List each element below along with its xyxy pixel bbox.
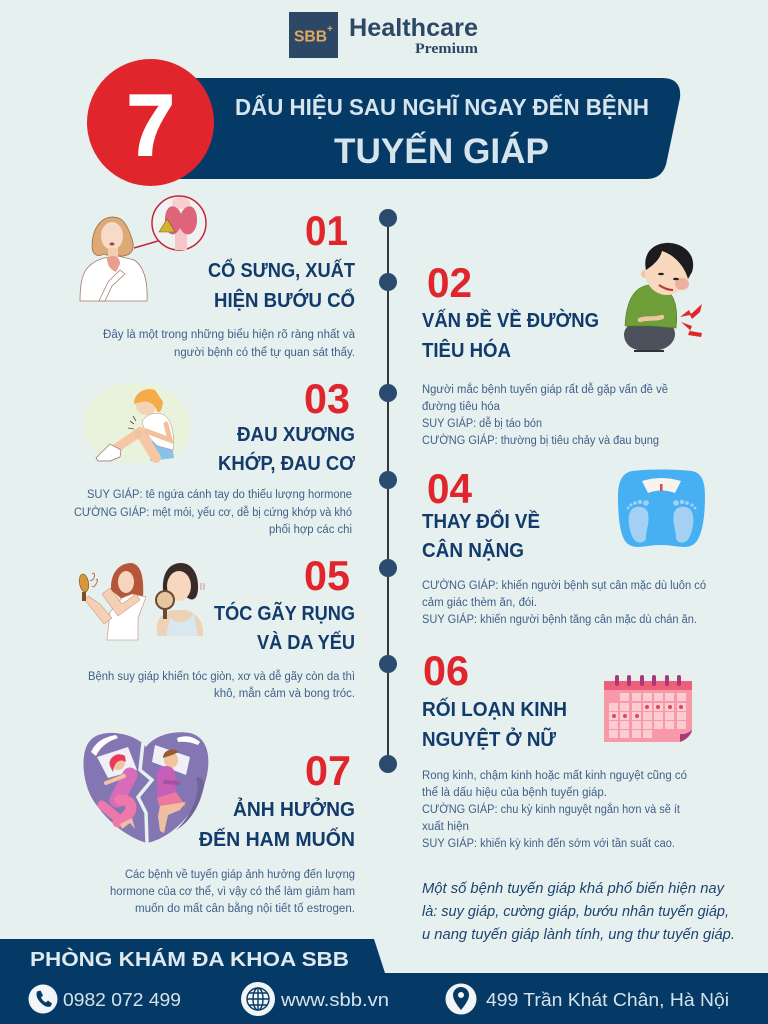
text 03: CƯỜNG GIÁP: mệt mỏi, yếu cơ, dễ bị cứng khớp và khó xyxy=(74,506,352,519)
number 06: 06 xyxy=(423,647,469,694)
number 04: 04 xyxy=(427,465,473,512)
text 02: SUY GIÁP: dễ bị táo bón xyxy=(422,417,542,430)
footer panel xyxy=(0,939,768,1024)
title 01: CỔ SƯNG, XUẤT xyxy=(208,258,355,282)
title 05: VÀ DA YẾU xyxy=(257,631,355,654)
logo: + xyxy=(327,24,333,35)
text 06: SUY GIÁP: khiến kỳ kinh đến sớm với tần suất cao. xyxy=(422,837,675,850)
contact: phone: 0982 072 499 xyxy=(63,990,181,1010)
title 02: VẤN ĐỀ VỀ ĐƯỜNG xyxy=(422,308,599,332)
text 07: Các bệnh về tuyến giáp ảnh hưởng đến lượng xyxy=(125,869,355,881)
closing note: là: suy giáp, cường giáp, bướu nhân tuyến giáp, xyxy=(422,903,729,920)
closing note: u nang tuyến giáp lành tính, ung thư tuyến giáp. xyxy=(422,926,735,943)
icon: woman with thyroid xyxy=(80,196,206,301)
contact: address xyxy=(446,984,729,1014)
closing note: Một số bệnh tuyến giáp khá phổ biến hiện nay xyxy=(422,880,725,897)
title 04: CÂN NẶNG xyxy=(422,538,524,562)
text 06: xuất hiện xyxy=(422,821,469,833)
title 02 xyxy=(422,308,599,362)
red circle with number 7 xyxy=(87,59,214,186)
title 06 xyxy=(422,697,567,751)
title 05 xyxy=(214,601,355,654)
text 02 xyxy=(422,383,668,447)
right pillow xyxy=(152,745,190,775)
text 05 xyxy=(88,670,355,700)
title 01 xyxy=(208,258,355,312)
text 02: đường tiêu hóa xyxy=(422,401,501,413)
heading line: DẤU HIỆU SAU NGHĨ NGAY ĐẾN BỆNH xyxy=(235,93,649,120)
text 01: người bệnh có thể tự quan sát thấy. xyxy=(174,347,355,359)
title 02: TIÊU HÓA xyxy=(422,338,511,362)
icon: woman with knee pain xyxy=(84,383,190,463)
title 03: ĐAU XƯƠNG xyxy=(237,424,355,446)
text 07: hormone của cơ thể, vì vậy có thể làm giảm ham xyxy=(110,886,355,898)
contact: address: 499 Trần Khát Chân, Hà Nội xyxy=(486,990,729,1010)
logo: Healthcare xyxy=(349,14,478,42)
title 04 xyxy=(422,509,540,562)
text 01 xyxy=(103,329,356,359)
text 06: CƯỜNG GIÁP: chu kỳ kinh nguyệt ngắn hơn và sẽ ít xyxy=(422,803,681,816)
text 06: thể là dấu hiệu của bệnh tuyến giáp. xyxy=(422,787,607,799)
closing note xyxy=(422,880,735,943)
text 07: muốn do mất cân bằng nội tiết tố estrogen. xyxy=(135,902,355,915)
number 07: 07 xyxy=(305,747,351,794)
logo: SBB xyxy=(294,28,327,46)
text 04: cảm giác thèm ăn, đói. xyxy=(422,597,537,609)
text 06 xyxy=(422,770,687,850)
icon: broken heart couple xyxy=(83,732,208,843)
text 04: SUY GIÁP: khiến người bệnh tăng cân mặc dù chán ăn. xyxy=(422,613,697,626)
text 01: Đây là một trong những biểu hiện rõ ràng nhất và xyxy=(103,329,356,341)
contact: website xyxy=(241,982,389,1016)
title banner xyxy=(170,78,680,179)
title 07: ĐẾN HAM MUỐN xyxy=(199,827,355,851)
left pillow xyxy=(97,747,137,778)
text 04: CƯỜNG GIÁP: khiến người bệnh sụt cân mặc dù luôn có xyxy=(422,579,706,592)
title 01: HIỆN BƯỚU CỔ xyxy=(214,288,355,312)
icon: hair loss and skin xyxy=(78,563,204,640)
title 06: RỐI LOẠN KINH xyxy=(422,697,567,721)
title 03: KHỚP, ĐAU CƠ xyxy=(218,451,356,475)
text 04 xyxy=(422,579,706,626)
title 05: TÓC GÃY RỤNG xyxy=(214,601,355,625)
text 02: Người mắc bệnh tuyến giáp rất dễ gặp vấn đề về xyxy=(422,383,668,396)
red circle with number 7: 7 xyxy=(126,77,175,174)
title 06: NGUYỆT Ở NỮ xyxy=(422,727,556,751)
text 06: Rong kinh, chậm kinh hoặc mất kinh nguyệt cũng có xyxy=(422,770,687,782)
title 03 xyxy=(218,424,356,475)
text 07 xyxy=(110,869,355,915)
logo: Premium xyxy=(415,41,479,57)
title 07: ẢNH HƯỞNG xyxy=(233,797,355,821)
heading: tuyến giáp: TUYẾN GIÁP xyxy=(334,131,549,171)
icon: boy with stomach ache xyxy=(624,243,702,352)
title 04: THAY ĐỔI VỀ xyxy=(422,509,540,533)
number 02: 02 xyxy=(427,259,472,306)
text 05: khô, mẫn cảm và bong tróc. xyxy=(214,687,355,700)
text 03: phối hợp các chi xyxy=(269,524,352,536)
text 02: CƯỜNG GIÁP: thường bị tiêu chảy và đau bụng xyxy=(422,434,659,447)
timeline xyxy=(379,209,397,773)
number 05: 05 xyxy=(304,552,350,599)
logo xyxy=(289,12,479,58)
clinic name: PHÒNG KHÁM ĐA KHOA SBB xyxy=(30,947,349,971)
text 05: Bệnh suy giáp khiến tóc giòn, xơ và dễ gãy còn da thì xyxy=(88,670,355,683)
number 01: 01 xyxy=(305,207,348,254)
title 07 xyxy=(199,797,355,851)
icon: calendar xyxy=(604,675,692,742)
contact: website: www.sbb.vn xyxy=(280,990,389,1010)
text 03: SUY GIÁP: tê ngứa cánh tay do thiếu lượng hormone xyxy=(87,488,352,501)
icon: weighing scale xyxy=(618,470,705,547)
contact: phone xyxy=(28,984,181,1014)
number 03: 03 xyxy=(304,375,350,422)
text 03 xyxy=(74,488,352,536)
